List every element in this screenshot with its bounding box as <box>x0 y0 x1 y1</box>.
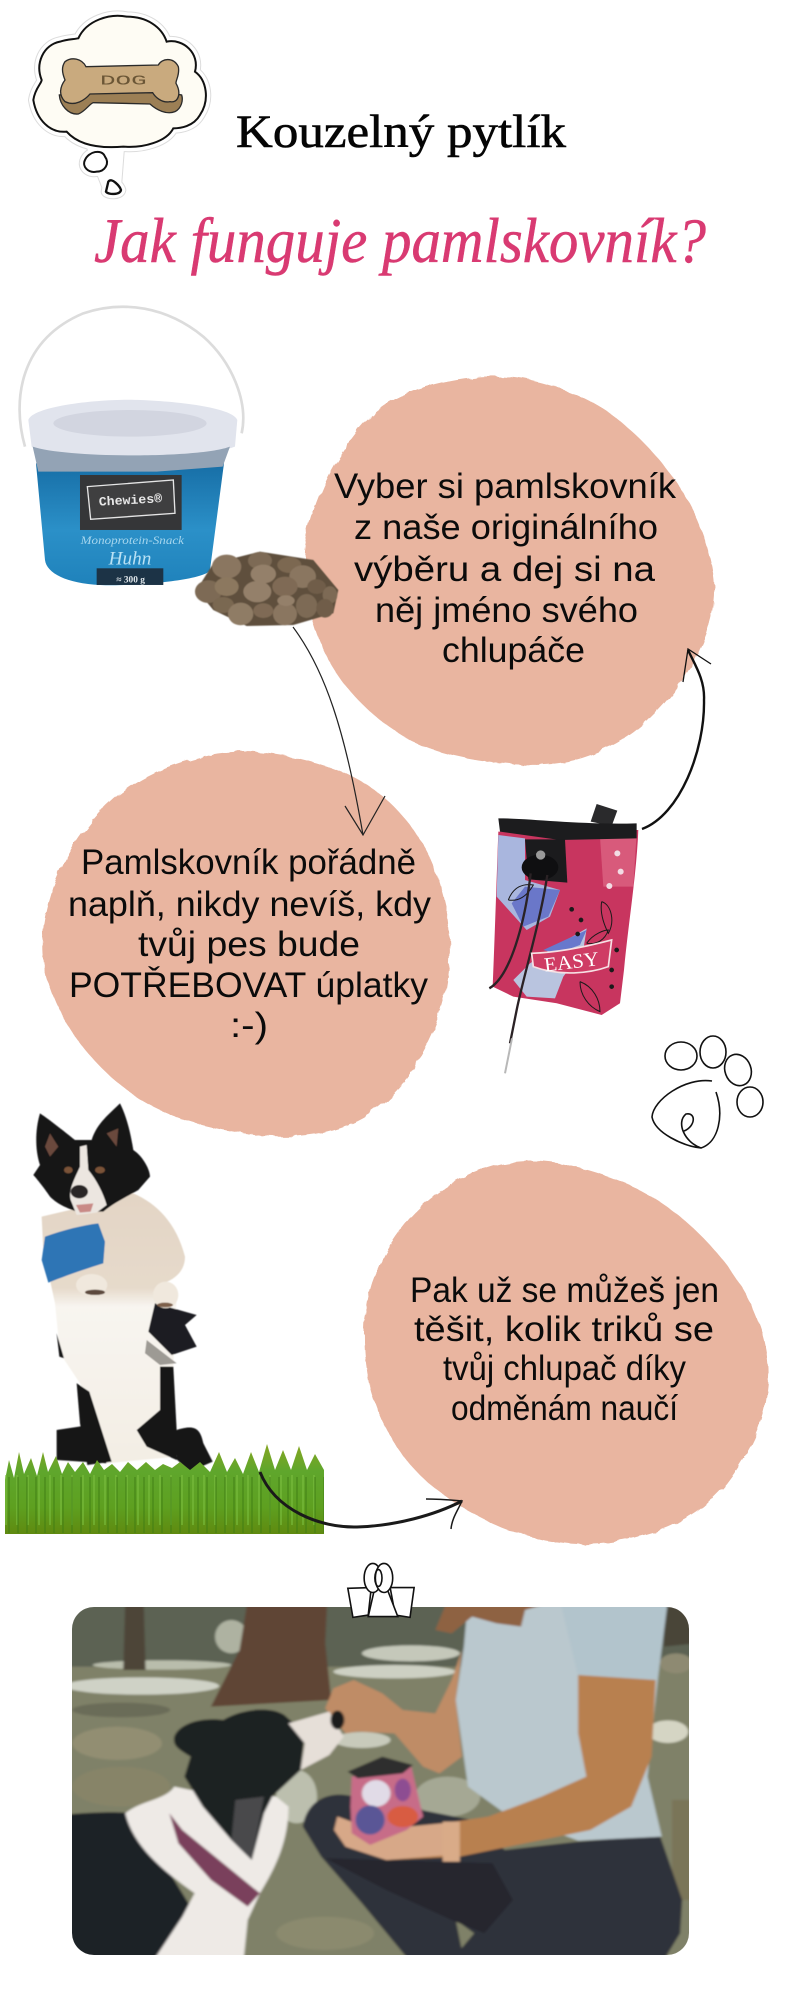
image: grass <box>5 1444 324 1534</box>
panel: blob step 3 <box>364 1161 769 1544</box>
icon: binder clip <box>348 1563 414 1617</box>
bucket weight <box>97 568 163 585</box>
photo dog chest <box>125 1787 288 1960</box>
pouch rim <box>498 818 637 840</box>
text: step 1: výběru a dej si na <box>354 550 656 589</box>
photo dog body <box>72 1811 190 1955</box>
photo handler legs <box>303 1795 682 1960</box>
dog body <box>42 1193 185 1463</box>
pouch body <box>493 830 638 1015</box>
photo handler near arm <box>389 1674 658 1862</box>
grass blades <box>5 1475 324 1525</box>
arrow: pouch to step 1 <box>642 649 711 829</box>
text: step 2: tvůj pes bude <box>138 925 360 964</box>
image: treat bucket <box>20 307 243 585</box>
text: step 1: Vyber si pamlskovník <box>334 467 677 506</box>
text: step 3: tvůj chlupač díky <box>443 1349 686 1388</box>
bucket handle <box>20 307 243 447</box>
photo handler far arm <box>325 1650 462 1773</box>
text: step 2: Pamlskovník pořádně <box>81 843 416 882</box>
photo handler hair <box>434 1607 540 1634</box>
text: step 3 <box>410 1271 719 1428</box>
dog black sides <box>57 1333 177 1465</box>
bucket label <box>80 475 182 530</box>
pouch flowers <box>609 853 621 886</box>
panel: blob step 1 <box>304 376 715 765</box>
dog eyes <box>64 1167 73 1173</box>
heading: Jak funguje pamlskovník?: Jak funguje pamlskovník? <box>94 205 706 276</box>
dog paws <box>76 1274 107 1296</box>
photo background <box>72 1665 689 1955</box>
text: step 3: odměnám naučí <box>451 1389 678 1428</box>
icon: bone <box>59 59 182 114</box>
pouch leaves <box>508 885 612 1012</box>
dog toy <box>42 1223 105 1283</box>
text: step 2: POTŘEBOVAT úplatky <box>69 966 429 1005</box>
pouch paw prints <box>572 909 617 987</box>
text: step 1: něj jméno svého <box>375 591 638 630</box>
dog ears inner <box>45 1128 118 1157</box>
arrow: dog to step 3 <box>260 1472 462 1529</box>
text: step 3: těšit, kolik triků se <box>414 1310 714 1349</box>
icon: thought cloud <box>33 16 206 147</box>
bucket body <box>36 463 224 585</box>
text: step 3: Pak už se můžeš jen <box>410 1271 719 1310</box>
pouch toggle <box>522 855 558 880</box>
photo handler shirt <box>456 1600 666 1841</box>
image: treats pile <box>195 552 338 626</box>
icon: bubble tail large <box>84 152 107 172</box>
pouch ribbon label: EASY <box>543 948 600 977</box>
photo pouch <box>350 1765 423 1845</box>
icon: bubble tail small <box>106 180 121 194</box>
pouch tab <box>591 804 617 826</box>
sticker halo <box>33 16 206 194</box>
dog head <box>33 1103 150 1212</box>
text: step 2: :-) <box>230 1006 268 1045</box>
image: standing border collie <box>33 1103 213 1472</box>
icon: thought bubble with bone <box>33 16 206 194</box>
text: step 2: naplň, nikdy nevíš, kdy <box>68 885 432 924</box>
photo tree trunks <box>211 1600 331 1707</box>
panel: blob step 2 <box>43 752 450 1136</box>
photo dog nose <box>331 1711 344 1729</box>
icon: paw print <box>652 1036 763 1148</box>
dog mouth <box>76 1203 93 1213</box>
dog hind fur <box>57 1426 213 1472</box>
photo dog head <box>174 1710 305 1860</box>
bucket lid <box>28 400 237 457</box>
photo dog collar <box>169 1813 260 1907</box>
heading: Kouzelný pytlík: Kouzelný pytlík <box>236 106 567 158</box>
text: step 1 <box>334 467 677 670</box>
arrow: treats to step 2 <box>293 627 385 835</box>
bucket flavour: Huhn <box>108 549 151 570</box>
text: step 2 <box>68 843 432 1045</box>
bucket brand: Chewies® <box>98 491 163 510</box>
text: step 1: chlupáče <box>442 631 585 670</box>
photo dog muzzle <box>288 1712 344 1770</box>
photo light patches <box>64 1677 219 1695</box>
bucket product line: Monoprotein-Snack <box>80 533 185 547</box>
bone label: DOG <box>100 74 147 90</box>
image: photo of dog and handler <box>60 1600 705 1963</box>
pouch pattern <box>497 835 560 930</box>
pouch ribbon <box>532 940 612 973</box>
image: treat pouch <box>489 804 638 1073</box>
photo watch <box>443 1822 460 1862</box>
text: step 1: z naše originálního <box>354 508 658 547</box>
dog tail fur <box>148 1303 197 1355</box>
dog blaze <box>70 1145 107 1215</box>
pouch toggle strap <box>525 839 567 883</box>
dog nose <box>71 1185 88 1198</box>
pouch cord <box>489 873 547 1043</box>
bucket weight text: ≈ 300 g <box>116 575 145 585</box>
